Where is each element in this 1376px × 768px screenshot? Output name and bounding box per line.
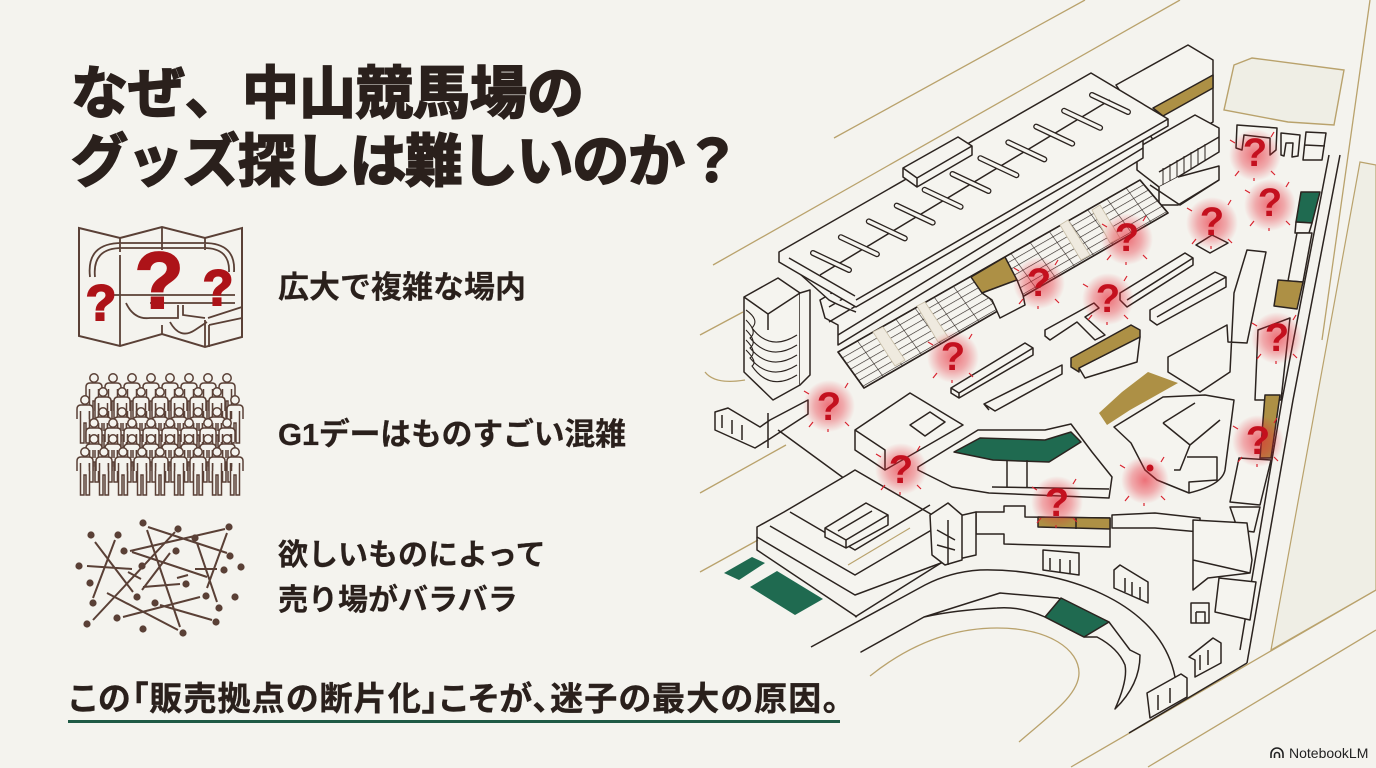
marker 9: ? [1246, 419, 1270, 463]
gold site lines [700, 0, 1376, 767]
marker 2: ? [1258, 181, 1282, 225]
marker 7: ? [941, 335, 965, 379]
left tower [744, 278, 810, 400]
marker 6: ? [1096, 277, 1120, 321]
label: G1 day crowding: G1デーはものすごい混雑 [278, 417, 626, 452]
title: なぜ、中山競馬場の [71, 62, 584, 126]
light ground plots [1224, 58, 1376, 650]
marker 8: ? [1265, 316, 1289, 360]
marker 5 [1013, 257, 1065, 309]
icon: folded map with question marks: ? [203, 260, 233, 316]
NotebookLM logo mark [1271, 748, 1283, 758]
long east block [1168, 250, 1266, 392]
marker 3 [1186, 197, 1238, 249]
marker 10: ? [817, 385, 841, 429]
curved central hall [918, 424, 1112, 498]
label: scattered sales locations [278, 539, 546, 617]
inner apron [861, 593, 1140, 709]
icon: crowd of people [77, 374, 243, 495]
green lawns [724, 557, 823, 615]
marker 11 [875, 443, 927, 495]
label: scattered sales locations: 欲しいものによって [278, 539, 546, 572]
marker 12 [1031, 476, 1083, 528]
roof bench [903, 137, 972, 187]
icon: folded map with question marks [79, 227, 242, 347]
map illustration: Nakayama racecourse [715, 45, 1340, 733]
bars centre [951, 343, 1033, 398]
label: vast and complex venue: 広大で複雑な場内 [278, 270, 526, 305]
marker 2 [1244, 179, 1296, 231]
underline [68, 720, 840, 723]
marker 7 [927, 331, 979, 383]
side stand block [1137, 115, 1219, 205]
roof slats [813, 95, 1128, 270]
gold pavilion [1071, 325, 1140, 378]
marker 1 [1229, 129, 1281, 181]
icon: tangled network [75, 519, 245, 637]
south-west terrace [757, 470, 976, 617]
south strip [976, 506, 1200, 547]
mid west building [855, 393, 963, 470]
marker 9 [1232, 415, 1284, 467]
stand tiers [790, 110, 1143, 345]
title: グッズ探しは難しいのか？ [71, 130, 739, 194]
marker 5: ? [1027, 261, 1051, 305]
marker 4 [1101, 213, 1153, 265]
marker 3: ? [1200, 200, 1224, 244]
seating bowl [838, 180, 1168, 388]
small plaza square [1196, 235, 1228, 253]
marker 8 [1251, 312, 1303, 364]
marker 13 [1120, 456, 1169, 506]
title [71, 62, 739, 194]
north gates [1236, 125, 1326, 160]
outer curve [811, 570, 1175, 677]
gold forecourt [1099, 372, 1178, 425]
marker 10 [803, 380, 855, 432]
east complex [1114, 395, 1234, 493]
tower at terrace [930, 503, 962, 565]
label: scattered sales locations: 売り場がバラバラ [278, 584, 518, 617]
outer east wall [1230, 155, 1340, 663]
south-east buildings [1191, 520, 1256, 623]
marker 6 [1082, 273, 1134, 325]
marker 1: ? [1243, 131, 1267, 175]
question markers on map [803, 129, 1303, 528]
icon: folded map with question marks: ? [86, 275, 116, 331]
west small block [715, 400, 860, 490]
south gates [1043, 550, 1148, 603]
NotebookLM wordmark: NotebookLM [1289, 745, 1368, 761]
marker 11: ? [889, 448, 913, 492]
corner gates [1129, 638, 1247, 733]
marker 12: ? [1045, 481, 1069, 525]
icon: folded map with question marks: ? [135, 236, 183, 325]
marker 4: ? [1115, 216, 1139, 260]
rear block [1116, 45, 1213, 150]
main roof [779, 73, 1168, 307]
conclusion statement: この「販売拠点の断片化」こそが、迷子の最大の原因。 [69, 680, 840, 717]
